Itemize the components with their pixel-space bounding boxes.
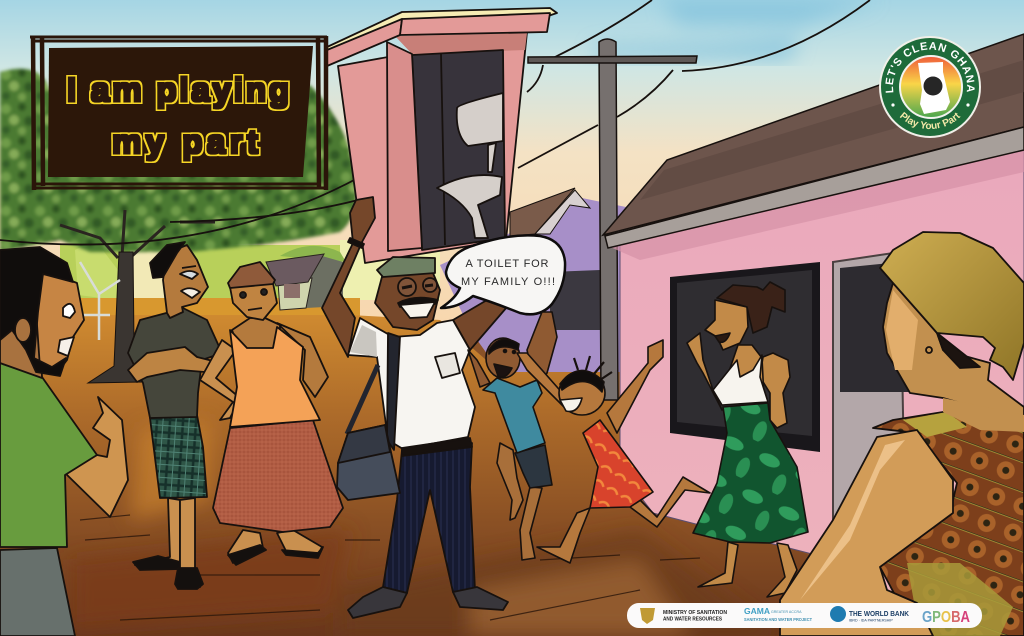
tie [387, 333, 400, 450]
GAMA logo [744, 606, 812, 623]
face [705, 300, 748, 350]
dark panel [48, 46, 313, 177]
hair [489, 339, 519, 354]
orange top [230, 327, 320, 427]
Let's Clean Ghana badge: Play Your Part [900, 112, 960, 130]
wires [0, 0, 870, 245]
hair [0, 247, 73, 376]
left leg [177, 498, 200, 587]
booth interior [412, 50, 505, 250]
tree [0, 69, 357, 383]
shirt [483, 378, 545, 453]
chest [232, 318, 280, 352]
woman in green skirt [687, 282, 808, 597]
purple wall [440, 197, 626, 372]
headscarf [228, 262, 275, 288]
roof top strip [327, 8, 557, 52]
arm [62, 397, 128, 517]
window [550, 270, 600, 330]
raised left arm [322, 197, 375, 357]
bent leg [497, 443, 523, 520]
left man in green shirt [0, 247, 128, 636]
sandal [133, 556, 180, 570]
speech bubble: A TOILET FOR [466, 258, 549, 270]
moustache and smile [398, 298, 438, 307]
World Bank logo: IBRD · IDA PARTNERSHIP [849, 618, 893, 622]
sandals [228, 545, 266, 565]
distant windmill [80, 262, 120, 340]
cap [377, 257, 435, 277]
ground ink marks [80, 470, 700, 620]
feet [228, 530, 263, 563]
GAMA logo: GREATER ACCRA [771, 610, 802, 614]
shoulder panel [903, 412, 967, 437]
GAMA logo: GAMA [744, 606, 770, 616]
standing leg [520, 487, 542, 560]
left arm [687, 333, 722, 410]
face [36, 270, 84, 373]
title text: my part [112, 123, 258, 160]
door window [840, 262, 912, 392]
utility pole [528, 39, 697, 400]
window left [670, 262, 820, 452]
hair [880, 232, 1024, 380]
emblem [924, 76, 942, 96]
man with crossed arms [128, 242, 222, 589]
head [559, 371, 605, 415]
right leg [135, 498, 180, 567]
arm to boy [517, 353, 580, 413]
shorts [150, 415, 207, 498]
bag flap [338, 425, 390, 463]
ear [15, 318, 31, 342]
roof front fascia [400, 13, 550, 35]
girl in red dress [517, 340, 710, 563]
raised toilet booth [327, 8, 557, 263]
smile [494, 364, 512, 377]
pink house [603, 34, 1024, 636]
right shoe [453, 587, 508, 610]
partner logo strip [627, 603, 982, 628]
ground shading [70, 420, 780, 636]
neck to shoulder [943, 398, 1024, 432]
door [833, 252, 905, 520]
neck and face [883, 283, 1024, 427]
wristband [348, 238, 364, 248]
GPOBA logo: GPOBA [922, 609, 970, 626]
background bush and lawn [60, 240, 440, 322]
open door [387, 42, 422, 251]
roof [603, 34, 1024, 235]
eyes and mouth [240, 292, 246, 298]
roof left fascia [327, 19, 402, 66]
raised arms [527, 312, 557, 383]
ministry logo: MINISTRY OF SANITATION [663, 610, 727, 616]
main man carrying toilet [322, 197, 508, 618]
hair shadow [937, 333, 980, 368]
cistern [457, 93, 503, 146]
boy in blue shirt [468, 312, 557, 560]
eye and mouth [63, 304, 75, 318]
woman in orange top [200, 262, 343, 565]
trousers [383, 443, 475, 593]
branches [60, 210, 215, 258]
jeans [0, 548, 75, 636]
earring [926, 347, 932, 353]
front leg [537, 508, 590, 563]
bowl [437, 175, 502, 238]
skirt [213, 420, 343, 532]
house wall [620, 130, 1024, 636]
arm highlight [800, 440, 905, 600]
booth wall [338, 32, 527, 263]
left shoe [348, 587, 407, 618]
purple house behind [440, 188, 626, 372]
raised right arm [453, 300, 507, 350]
shirt shade [350, 325, 377, 357]
smile [560, 398, 582, 411]
arm [780, 430, 953, 636]
blonde woman foreground [780, 232, 1024, 636]
GAMA logo: SANITATION AND WATER PROJECT [744, 617, 812, 623]
eyes [402, 285, 433, 288]
wall shade [610, 150, 1024, 260]
brown roof [510, 188, 575, 236]
map of Ghana [918, 62, 950, 114]
face and neck [163, 245, 208, 318]
legs [698, 542, 738, 587]
shirt [128, 308, 222, 418]
bag [337, 425, 400, 500]
World Bank logo [830, 606, 910, 622]
ministry logo [640, 608, 727, 624]
smile [715, 333, 730, 342]
back leg [630, 477, 710, 527]
arms [128, 347, 217, 382]
ground [0, 315, 820, 636]
lower panel [907, 563, 1013, 636]
hair [717, 282, 785, 333]
World Bank logo: THE WORLD BANK [849, 609, 910, 618]
right arm [277, 323, 328, 397]
title text: I am playing [67, 71, 289, 108]
face [375, 273, 440, 330]
shirt [0, 363, 97, 547]
trunk [88, 252, 142, 383]
Let's Clean Ghana badge: LET'S CLEAN GHANA [885, 42, 975, 93]
canopy [0, 69, 357, 252]
white top [713, 355, 768, 405]
speech bubble: MY FAMILY O!!! [461, 276, 555, 288]
sky background [0, 0, 1024, 340]
dress [873, 412, 1024, 636]
shirt [348, 318, 475, 449]
Let's Clean Ghana badge [879, 36, 981, 138]
shorts [515, 445, 552, 488]
hair [150, 242, 185, 278]
left arm [200, 340, 240, 420]
raised arm [607, 340, 663, 433]
dress [583, 420, 653, 508]
eye and mouth [180, 266, 198, 279]
right arm [760, 353, 790, 428]
title banner [30, 36, 327, 190]
neck [0, 310, 42, 378]
head [486, 338, 520, 378]
clouds [590, 0, 880, 60]
belt [402, 438, 472, 456]
pocket [435, 353, 460, 378]
glasses [398, 278, 437, 296]
sandal [175, 568, 203, 589]
gutter [605, 127, 1024, 248]
frame [30, 36, 327, 190]
chest [722, 345, 764, 398]
title text [67, 71, 289, 160]
bag strap [347, 365, 378, 434]
face [230, 283, 277, 320]
distant house [266, 246, 346, 310]
skirt [693, 403, 808, 543]
ministry logo: AND WATER RESOURCES [663, 616, 722, 622]
speech bubble [441, 235, 565, 314]
cheek highlight [886, 290, 918, 370]
hair [560, 370, 604, 392]
